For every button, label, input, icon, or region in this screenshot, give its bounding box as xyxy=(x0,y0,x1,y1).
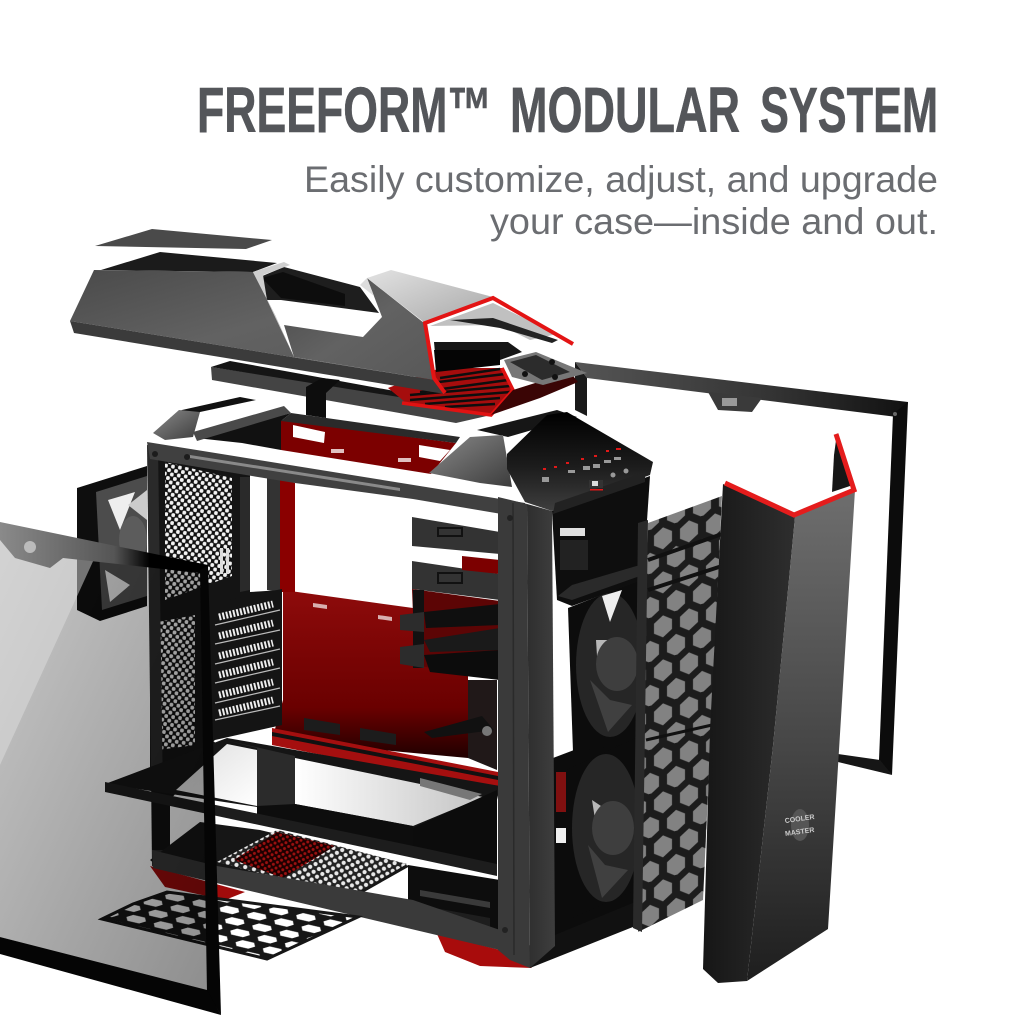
PSU shroud shelf xyxy=(105,738,500,876)
PCI expansion slots xyxy=(213,589,282,738)
bottom drive cage xyxy=(408,865,500,940)
rear mesh panel xyxy=(150,445,282,790)
title: MODULAR xyxy=(510,74,740,146)
tempered glass side panel xyxy=(0,522,221,1015)
top inner frame xyxy=(170,397,577,450)
control console top xyxy=(507,412,653,514)
door logo badge: COOLER xyxy=(784,814,815,825)
top loose mesh plate xyxy=(95,229,272,249)
red tray top strip xyxy=(281,420,456,474)
front upper bays interior xyxy=(552,476,650,606)
magnetic front door xyxy=(703,433,855,983)
side fan rear xyxy=(77,466,147,621)
drive cage xyxy=(400,589,500,770)
front interior backing xyxy=(523,596,640,968)
title: SYSTEM xyxy=(760,74,938,146)
lid inner block and screw plate xyxy=(434,342,587,385)
subtitle: Easily customize, adjust, and upgrade xyxy=(304,159,938,200)
motherboard-side top rail xyxy=(147,442,525,518)
front panel fan 2 xyxy=(566,738,640,918)
subtitle: your case—inside and out. xyxy=(490,201,938,242)
door logo badge xyxy=(784,809,815,841)
red vent under lid xyxy=(388,368,578,415)
title xyxy=(197,74,938,146)
red foot right xyxy=(437,934,532,968)
bottom frame rail xyxy=(152,850,500,950)
motherboard tray xyxy=(267,475,498,790)
red foot left xyxy=(150,866,245,900)
door logo badge: MASTER xyxy=(785,827,815,838)
front panel fan 1 xyxy=(568,580,644,752)
left frame column xyxy=(147,445,218,868)
top vented lid shell xyxy=(70,252,573,394)
drive bays xyxy=(412,517,500,600)
front hex mesh panel xyxy=(633,496,722,932)
subtitle xyxy=(304,159,938,242)
lid bracket xyxy=(211,361,491,423)
floor mesh xyxy=(150,822,410,900)
front pillar xyxy=(498,497,555,968)
foot mesh plate xyxy=(102,892,358,959)
title: FREEFORM™ xyxy=(197,74,492,146)
rear frame panel xyxy=(575,362,908,775)
front corner gussets xyxy=(153,410,512,487)
